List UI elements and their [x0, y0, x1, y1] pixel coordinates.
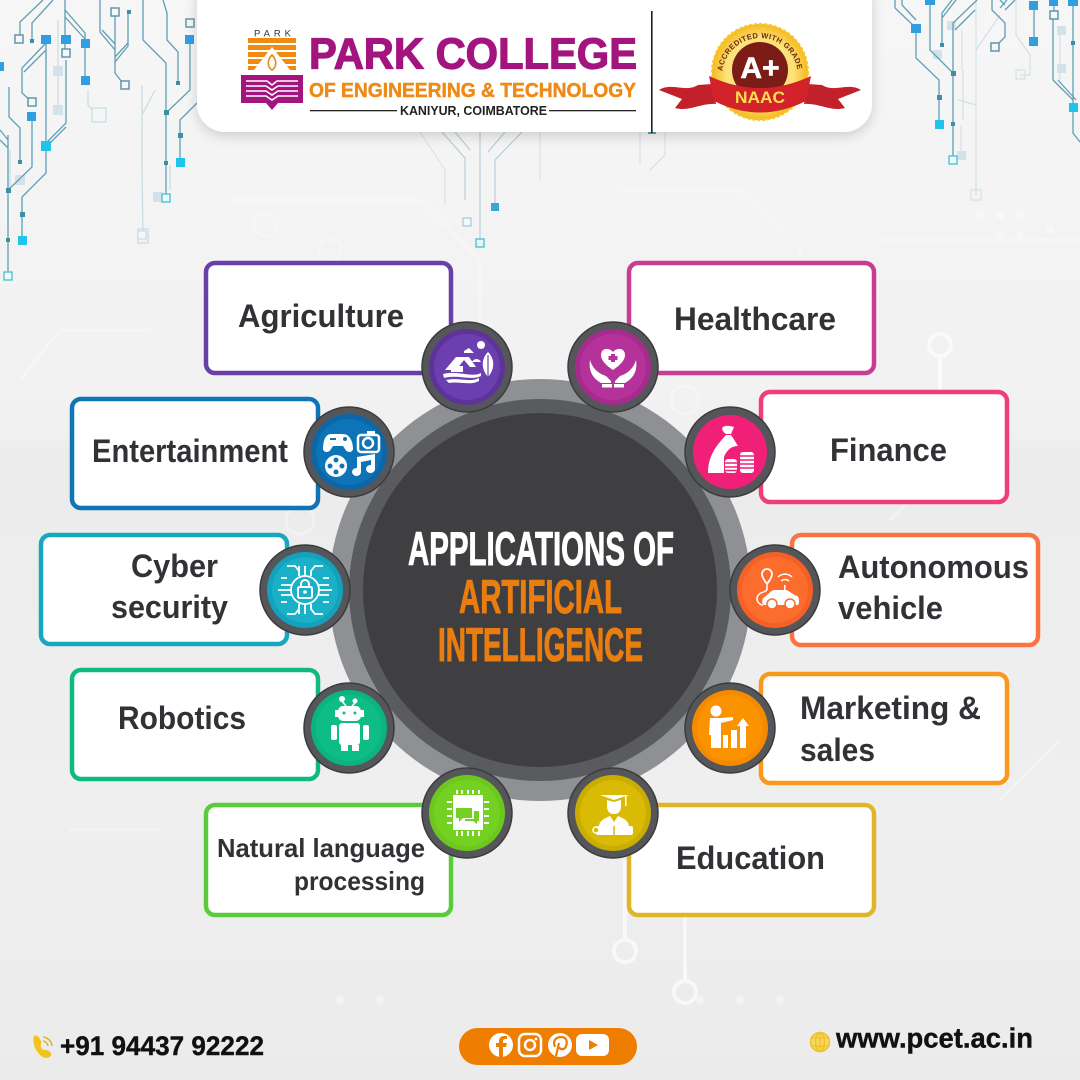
- panel: Healthcare: [629, 263, 874, 373]
- circuit traces: under header: [138, 131, 665, 247]
- icon: phone: [33, 1035, 52, 1058]
- panel: Education: Education: [676, 840, 825, 876]
- panel: Robotics: Robotics: [118, 700, 246, 736]
- panel: Agriculture: [206, 263, 451, 373]
- icon: autonomous vehicle: [730, 545, 820, 635]
- panel: Autonomous vehicle: vehicle: [838, 590, 943, 626]
- icon: entertainment: [304, 407, 394, 497]
- panel: Natural language processing: Natural language: [217, 833, 425, 863]
- icon: cyber security: [260, 545, 350, 635]
- panel: Agriculture: Agriculture: [238, 298, 404, 334]
- icon: robotics: [304, 683, 394, 773]
- panel: Cyber security: Cyber: [131, 548, 218, 584]
- icon: instagram: [519, 1034, 541, 1056]
- circuit traces: top left: [0, 0, 197, 280]
- panel: Cyber security: security: [111, 589, 228, 625]
- panel: Finance: Finance: [830, 432, 947, 468]
- footer: phone: +91 94437 92222: [60, 1031, 264, 1061]
- icon: marketing and sales: [685, 683, 775, 773]
- college subtitle: OF ENGINEERING & TECHNOLOGY: [309, 79, 636, 102]
- footer: social pill: [459, 1028, 637, 1065]
- panel: Entertainment: Entertainment: [92, 433, 288, 469]
- panel: Marketing and sales: Marketing &: [800, 690, 981, 726]
- panel: Autonomous vehicle: [792, 535, 1038, 645]
- panel: Entertainment: [72, 399, 318, 508]
- panel: Natural language processing: processing: [294, 866, 425, 896]
- logo emblem: PARK: [254, 28, 292, 40]
- logo emblem: [241, 28, 303, 110]
- panel: Healthcare: Healthcare: [674, 301, 836, 337]
- NAAC seal: ACCREDITED WITH GRADE: [718, 32, 802, 72]
- NAAC seal: [659, 23, 861, 121]
- title: INTELLIGENCE: [438, 618, 643, 671]
- icon: finance: [685, 407, 775, 497]
- panel: Cyber security: [41, 535, 287, 644]
- panel: Autonomous vehicle: Autonomous: [838, 549, 1029, 585]
- icon: healthcare: [568, 322, 658, 412]
- icon: agriculture: [422, 322, 512, 412]
- college location: KANIYUR, COIMBATORE: [400, 103, 547, 118]
- header panel: [192, 0, 877, 141]
- panel: Natural language processing: [206, 805, 451, 915]
- title: [408, 522, 674, 671]
- icon: pinterest: [548, 1033, 572, 1057]
- panel: Marketing and sales: [761, 674, 1007, 783]
- panel: Robotics: [72, 670, 318, 779]
- icon: globe: [810, 1032, 830, 1052]
- footer: website: www.pcet.ac.in: [835, 1022, 1033, 1054]
- panel: Finance: [761, 392, 1007, 502]
- icon: youtube: [576, 1034, 609, 1056]
- circuit traces: top right: [895, 0, 1080, 200]
- NAAC seal: NAAC: [735, 88, 785, 107]
- icon: facebook: [489, 1033, 513, 1057]
- panel: Education: [629, 805, 874, 915]
- title: ARTIFICIAL: [459, 570, 622, 623]
- NAAC seal: A+: [740, 52, 780, 85]
- college name: PARK COLLEGE: [309, 30, 637, 78]
- panel: Marketing and sales: sales: [800, 732, 875, 768]
- icon: natural language processing: [422, 768, 512, 858]
- central hub: [329, 379, 751, 801]
- title: APPLICATIONS OF: [408, 522, 674, 575]
- icon: education: [568, 768, 658, 858]
